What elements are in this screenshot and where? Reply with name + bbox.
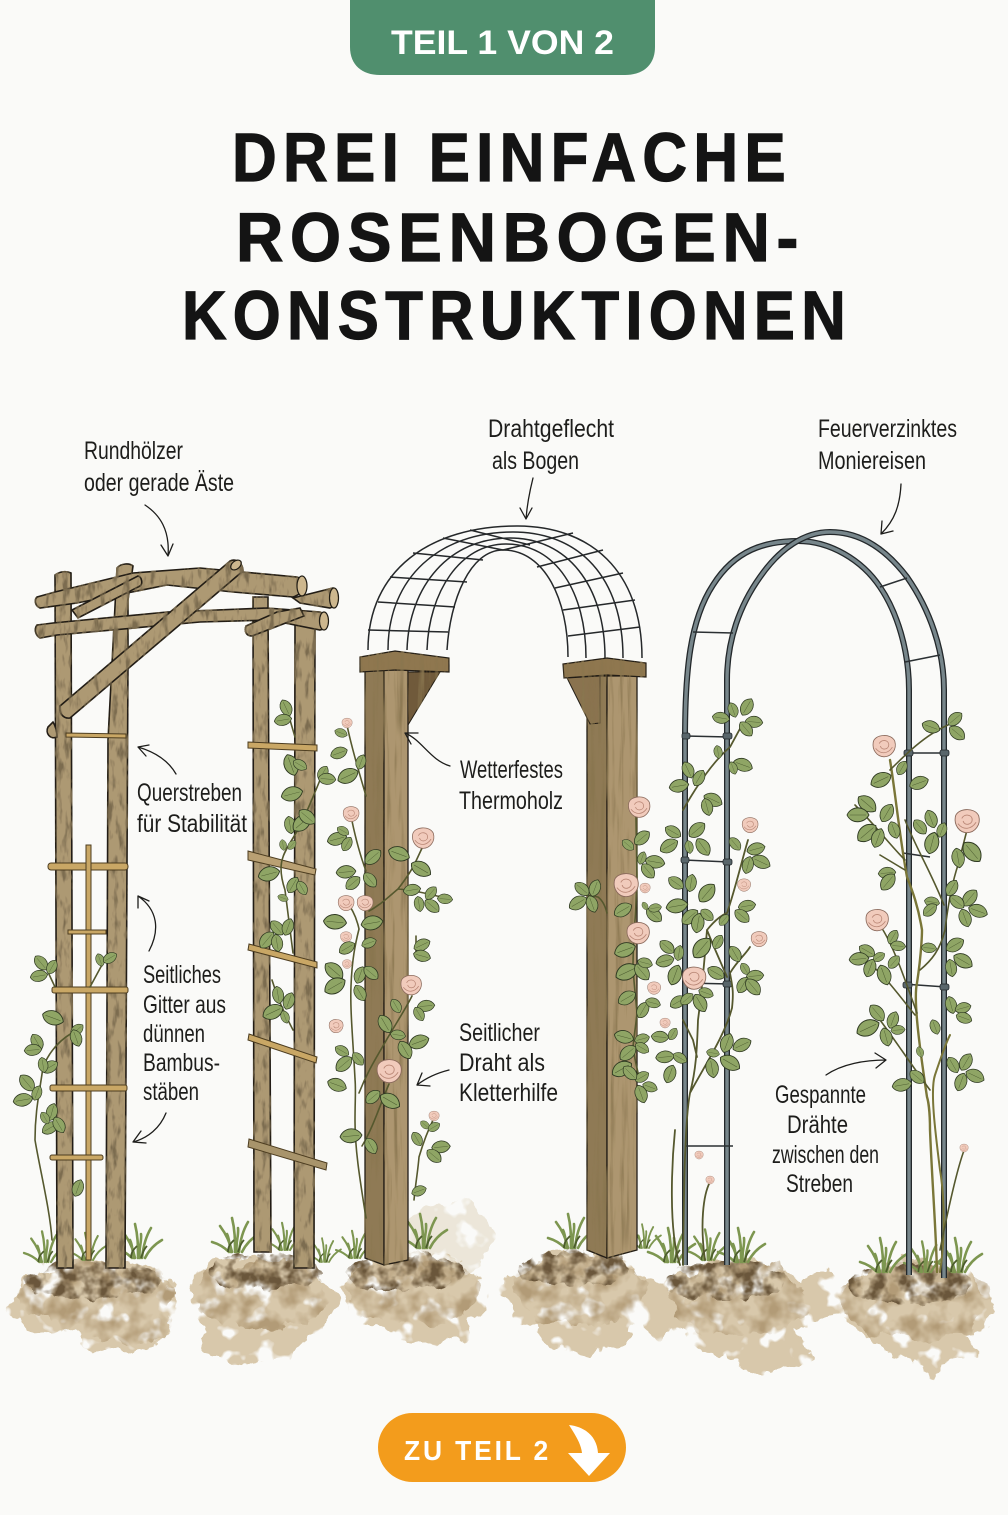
label: Wetterfestes Thermoholz: Wetterfestes <box>460 756 563 784</box>
label: Seitliches Gitter: stäben <box>143 1078 199 1106</box>
grass tufts <box>24 1214 982 1272</box>
icon: curved arrow <box>568 1425 610 1476</box>
soil wash: light <box>11 1201 993 1372</box>
front hoop outline <box>727 532 944 1278</box>
label: Querstreben <box>137 779 247 838</box>
timber posts <box>360 651 646 1265</box>
label: Seitliches Gitter: Gitter aus <box>143 991 226 1019</box>
label: Feuerverzinktes: Feuerverzinktes <box>818 415 957 443</box>
rose plant: arch 3 left <box>651 696 773 1265</box>
label: Seitlicher Draht: Kletterhilfe <box>459 1079 558 1107</box>
label: Gespannte Drähte: zwischen den <box>772 1141 879 1169</box>
arrow: to rebar <box>881 484 901 534</box>
label: Querstreben: Querstreben <box>137 779 242 807</box>
label: Seitlicher Draht: Seitlicher <box>459 1019 540 1047</box>
wire clamps <box>681 733 949 990</box>
title: KONSTRUKTIONEN <box>182 277 852 354</box>
label: Gespannte Drähte: Streben <box>786 1170 853 1198</box>
log beams <box>35 560 338 738</box>
label: Drahtgeflecht: als Bogen <box>492 447 579 475</box>
label: Rundhölzer: oder gerade Äste <box>84 469 234 497</box>
label: Seitlicher Draht: Draht als <box>459 1049 545 1077</box>
title: ROSENBOGEN- <box>236 199 805 276</box>
rose plant: arch 2 left <box>321 718 453 1218</box>
label: Drahtgeflecht: Drahtgeflecht <box>488 415 614 443</box>
arch 2: timber posts and wire mesh <box>360 526 646 1265</box>
label: Gespannte Drähte: Drähte <box>787 1111 848 1139</box>
rose plant: arch 1 right <box>256 698 336 1030</box>
arrow: up to lattice <box>138 896 156 951</box>
log end caps <box>229 558 338 630</box>
rose plant: arch 2 right <box>566 797 666 1105</box>
back hoop outline <box>685 541 909 1275</box>
title <box>182 119 852 354</box>
label: Gespannte Drähte: Gespannte <box>775 1081 866 1109</box>
arrow: down to lattice <box>133 1113 166 1143</box>
label: Seitliches Gitter: Seitliches <box>143 961 221 989</box>
rose plant: arch 1 lower left <box>12 950 119 1240</box>
soil: dark earth near the posts <box>22 1250 972 1305</box>
label: Feuerverzinktes <box>818 415 957 475</box>
title: DREI EINFACHE <box>232 119 792 196</box>
back hoop fill <box>685 541 909 1275</box>
label: Rundhölzer <box>84 437 234 497</box>
soil wash: mid tone <box>17 1254 987 1345</box>
label: Wetterfestes Thermoholz: Thermoholz <box>459 787 563 815</box>
label: Seitliches Gitter <box>143 961 226 1106</box>
front hoop fill <box>727 532 944 1278</box>
arrow: to side wire <box>417 1070 449 1086</box>
label: Seitliches Gitter: dünnen <box>143 1020 205 1048</box>
arch 3: steel rebar hoops <box>681 532 949 1278</box>
arrow: to mesh <box>520 478 533 519</box>
arrow: to timber post <box>405 733 450 766</box>
wire mesh arch <box>368 526 642 658</box>
arrow: to cross brace <box>138 745 176 774</box>
label: Wetterfestes Thermoholz <box>459 756 563 815</box>
arrow: to logs <box>145 505 173 556</box>
label: Seitliches Gitter: Bambus- <box>143 1049 220 1077</box>
arrow: to tensioned wires <box>826 1053 886 1075</box>
rose plant: arch 3 right <box>847 709 989 1272</box>
label: Gespannte Drähte <box>772 1081 879 1198</box>
label: Feuerverzinktes: Moniereisen <box>818 447 926 475</box>
label: Seitlicher Draht <box>459 1019 558 1107</box>
cross braces <box>48 733 327 1170</box>
button: to part 2 <box>378 1413 626 1482</box>
label: Drahtgeflecht <box>488 415 614 475</box>
arch 1: rustic log arch <box>35 558 338 1268</box>
log posts <box>55 564 315 1268</box>
label: Rundhölzer: Rundhölzer <box>84 437 183 465</box>
bamboo lattice <box>50 845 128 1260</box>
button: to part 2: ZU TEIL 2 <box>404 1435 551 1466</box>
badge: part 1 of 2 <box>350 0 655 75</box>
label: Querstreben: für Stabilität <box>137 810 247 838</box>
steel cross wires <box>684 578 946 1146</box>
badge: part 1 of 2: TEIL 1 VON 2 <box>391 24 614 62</box>
